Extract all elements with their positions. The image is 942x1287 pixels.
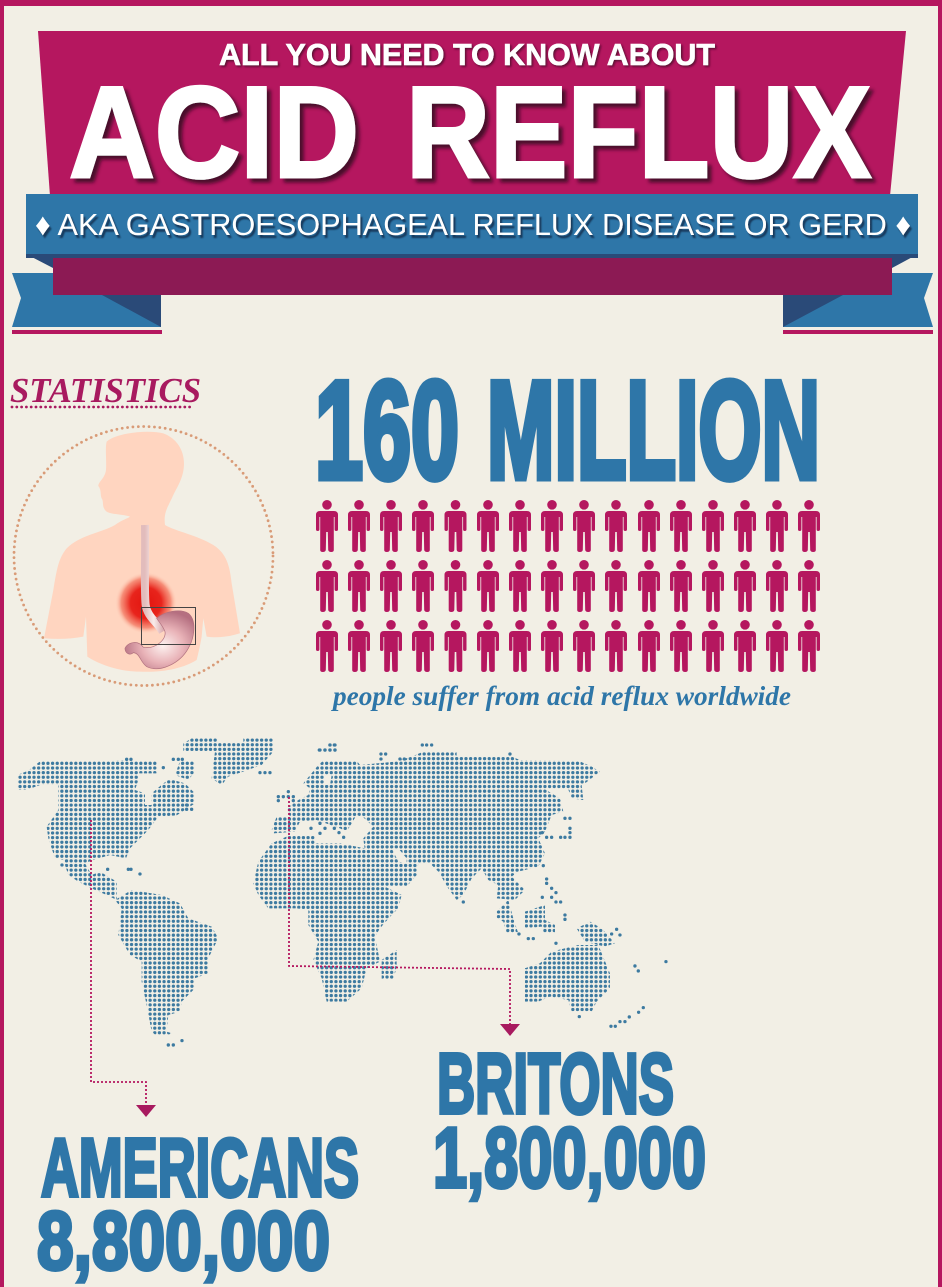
blue subtitle band: [26, 194, 918, 258]
stat: britons: [433, 1037, 706, 1206]
subtitle: ♦ AKA GASTROESOPHAGEAL REFLUX DISEASE OR GERD ♦: [35, 207, 911, 242]
heartburn glow: [115, 572, 177, 634]
stat: americans: 8,800,000: [37, 1194, 330, 1287]
main title: ACID: [69, 59, 359, 205]
caption: people suffer from acid reflux worldwide: [331, 681, 791, 711]
stomach: [125, 611, 194, 669]
main title: [69, 59, 871, 205]
stat: americans: [37, 1121, 359, 1287]
body silhouette: [44, 432, 240, 672]
detail box: [142, 608, 196, 644]
stat: britons: BRITONS: [437, 1037, 674, 1132]
esophagus: [145, 525, 163, 632]
pictogram: rows of people: [316, 500, 820, 672]
maroon under-band: [53, 258, 892, 295]
stat: britons: 1,800,000: [433, 1111, 706, 1206]
kicker heading: ALL YOU NEED TO KNOW ABOUT: [219, 37, 715, 72]
header banner: [12, 31, 933, 334]
magenta title panel: [38, 31, 906, 196]
big number: 160 million: [315, 353, 820, 508]
ribbon folds: [26, 254, 918, 268]
statistics heading: STATISTICS: [10, 371, 201, 410]
arrow: americans route: [91, 820, 156, 1117]
big number: 160 million: 160: [315, 353, 459, 508]
arrow: britons route: [289, 797, 520, 1036]
illustration: human torso with stomach: [14, 426, 273, 686]
stat: americans: AMERICANS: [41, 1121, 359, 1214]
dotted circle: [14, 426, 273, 686]
dotted world map: [15, 740, 685, 1045]
right ribbon tail: [783, 273, 933, 334]
left ribbon tail: [12, 273, 162, 334]
main title: REFLUX: [406, 59, 871, 205]
